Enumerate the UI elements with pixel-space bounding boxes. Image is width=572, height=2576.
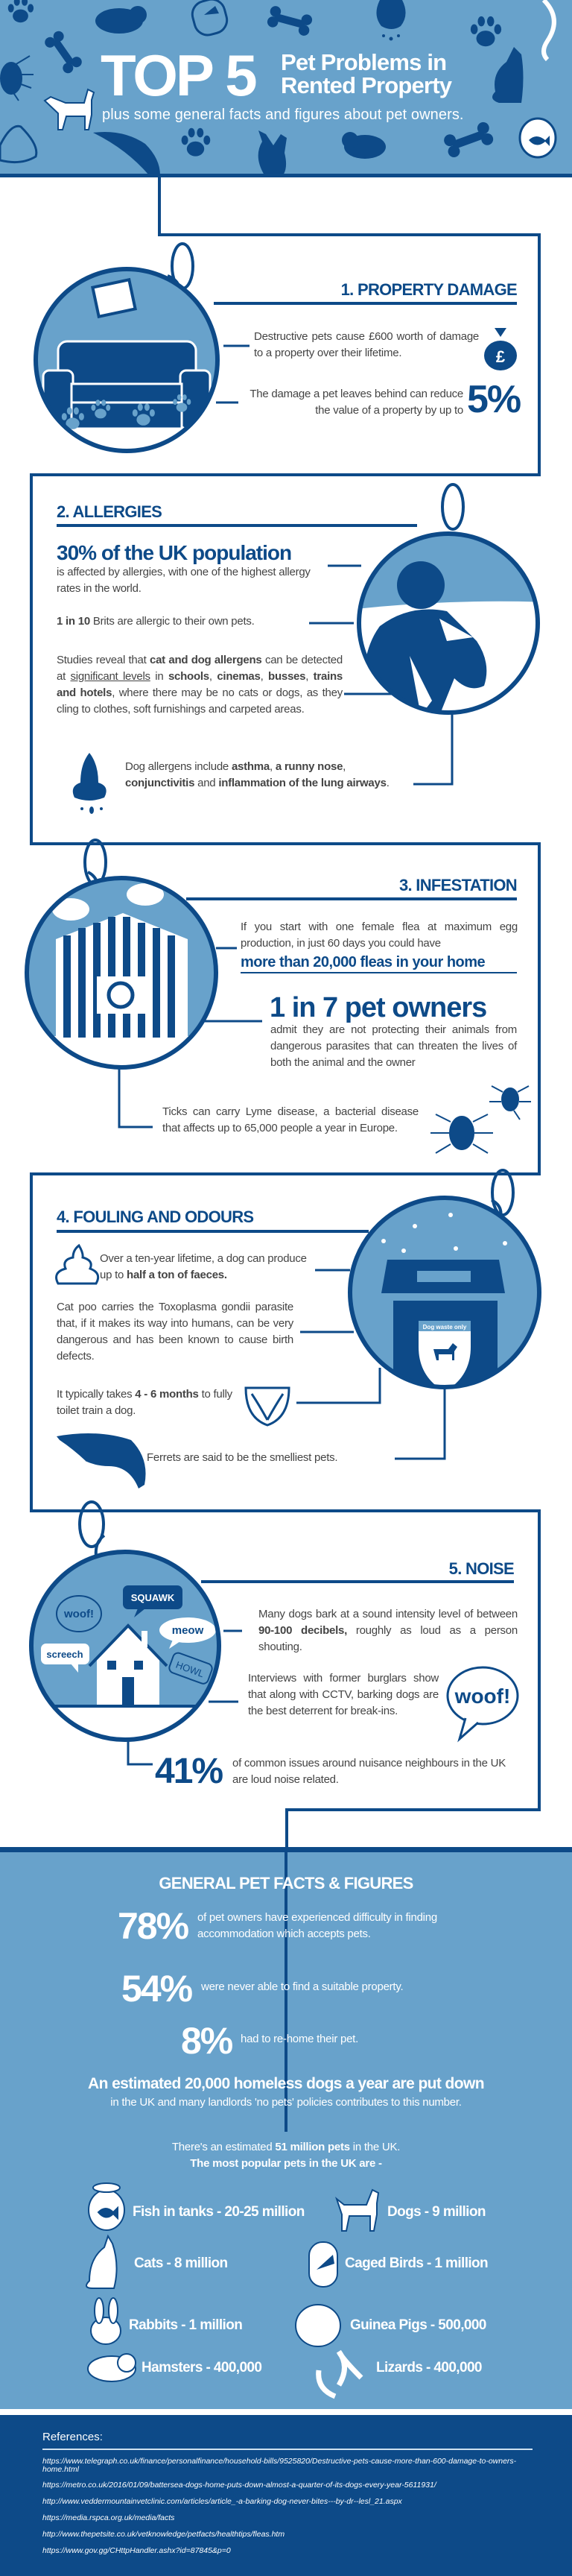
connectors section 1 (214, 303, 517, 402)
ferrets text: Ferrets are said to be the smelliest pets. (147, 1451, 337, 1464)
parasite text: admit they are not protecting their animals from dangerous parasites that can threaten the lives of both the animal and the owner (270, 1023, 517, 1069)
allergy 1 in 10: 1 in 10 Brits are allergic to their own pets. (57, 615, 255, 628)
stat 5%: 5% (467, 378, 520, 421)
icon: allergy tag (357, 483, 540, 715)
stat 78%: 78% (118, 1905, 188, 1947)
subtitle heading: Rented Property (281, 72, 451, 98)
decibels text: Many dogs bark at a sound intensity level of between 90-100 decibels, roughly as loud as a person shouting. (258, 1608, 518, 1653)
allergens text: Studies reveal that cat and dog allergens can be detected at significant levels in schools, cinemas, busses, trains and hotels, where there may be no cats or dogs, as they cling to clothes, soft furnishings and carpeted areas. (57, 654, 343, 716)
toxoplasma text: Cat poo carries the Toxoplasma gondii parasite that, if it makes its way into humans, can be very dangerous and has been known to cause birth defects. (57, 1301, 293, 1363)
icon: property damage tag (34, 242, 220, 453)
cats: Cats - 8 million (134, 2255, 228, 2271)
flea stat: more than 20,000 fleas in your home (241, 954, 485, 970)
icon: fouling tag (346, 1170, 547, 1398)
icon: ferret tail (57, 1433, 146, 1489)
nuisance text: of common issues around nuisance neighbours in the UK are loud noise related. (232, 1757, 506, 1786)
references list (42, 2457, 516, 2555)
burglars text: Interviews with former burglars show that along with CCTV, barking dogs are the best deterrent for break-ins. (248, 1672, 439, 1717)
stat 54%: 54% (121, 1968, 191, 2010)
section 1 text: damage cost: Destructive pets cause £600 worth of damage to a property over their lifetime. (254, 330, 479, 359)
references list: https://media.rspca.org.uk/media/facts (42, 2513, 174, 2522)
allergy text: is affected by allergies, with one of the highest allergy rates in the world. (57, 566, 311, 595)
section 2 heading: 2. ALLERGIES (57, 502, 162, 521)
icon: fouling tag: Dog waste only (423, 1324, 467, 1330)
references heading: References: (42, 2431, 103, 2443)
references list: https://www.gov.gg/CHttpHandler.ashx?id=87845&p=0 (42, 2546, 231, 2555)
flea text: If you start with one female flea at maximum egg production, in just 60 days you could have (241, 921, 518, 950)
1 in 7 stat: 1 in 7 pet owners (270, 992, 486, 1023)
fish: Fish in tanks - 20-25 million (133, 2204, 305, 2220)
homeless dogs text: An estimated 20,000 homeless dogs a year are put down (88, 2075, 484, 2092)
allergy stat: 30% of the UK population (57, 541, 291, 564)
subtitle heading (281, 49, 452, 98)
51 million text: There's an estimated 51 million pets in the UK. (172, 2141, 400, 2153)
section 1 heading: 1. PROPERTY DAMAGE (341, 280, 517, 299)
homeless dogs subtext: in the UK and many landlords 'no pets' policies contributes to this number. (110, 2096, 462, 2109)
pet icons (86, 2183, 378, 2396)
icon: ticks (430, 1086, 531, 1153)
stat 41%: 41% (155, 1752, 222, 1791)
78% text: of pet owners have experienced difficulty in finding accommodation which accepts pets. (197, 1911, 437, 1940)
references list: https://www.telegraph.co.uk/finance/personalfinance/household-bills/9525820/Destructive-pets-cause-more-than-600-damage-to-owners-home.html (42, 2457, 516, 2474)
guinea pigs: Guinea Pigs - 500,000 (350, 2317, 486, 2333)
icon: nose (73, 753, 107, 814)
header dog (45, 89, 94, 130)
icon: poo (57, 1246, 98, 1284)
54% text: were never able to find a suitable property. (201, 1980, 403, 1993)
8% text: had to re-home their pet. (241, 2033, 358, 2045)
tagline: plus some general facts and figures about pet owners. (102, 107, 464, 123)
header background (0, 0, 572, 177)
popular pets list (129, 2204, 488, 2375)
subtitle heading: Pet Problems in (281, 49, 446, 75)
ticks text: Ticks can carry Lyme disease, a bacterial disease that affects up to 65,000 people a year in Europe. (162, 1105, 419, 1134)
icon: noise tag: SQUAWK (131, 1592, 175, 1603)
dogs: Dogs - 9 million (387, 2204, 486, 2220)
51 million text (172, 2141, 400, 2170)
references list: http://www.veddermountainvetclinic.com/articles/article_-a-barking-dog-never-bites---by-dr--lesl_21.aspx (42, 2497, 402, 2506)
icon: woof bubble: woof! (454, 1685, 510, 1708)
references list: https://metro.co.uk/2016/01/09/battersea-dogs-home-puts-down-almost-a-quarter-of-its-dogs-every-year-5611931/ (42, 2481, 436, 2490)
hamsters: Hamsters - 400,000 (142, 2360, 261, 2375)
section 4 heading: 4. FOULING AND ODOURS (57, 1208, 253, 1226)
faeces text: Over a ten-year lifetime, a dog can produce up to half a ton of faeces. (100, 1252, 307, 1281)
icon: woof bubble (448, 1667, 518, 1739)
references list: http://www.thepetsite.co.uk/vetknowledge/petfacts/healthtips/fleas.htm (42, 2530, 285, 2539)
icon: noise tag: meow (172, 1624, 204, 1637)
lizards: Lizards - 400,000 (376, 2360, 482, 2375)
references background (0, 2415, 572, 2576)
general facts background (0, 1847, 572, 2409)
title: TOP 5 (101, 42, 255, 108)
symptoms text: Dog allergens include asthma, a runny nose, conjunctivitis and inflammation of the lung airways. (125, 760, 390, 789)
section 3 heading: 3. INFESTATION (399, 876, 517, 894)
stat 8%: 8% (181, 2020, 232, 2062)
general facts heading: GENERAL PET FACTS & FIGURES (159, 1874, 413, 1892)
caged birds: Caged Birds - 1 million (345, 2255, 488, 2271)
toilet training text: It typically takes 4 - 6 months to fully toilet train a dog. (57, 1388, 232, 1417)
icon: noise tag (30, 1502, 223, 1752)
section 1 text: value: The damage a pet leaves behind can reduce the value of a property by up to (250, 388, 463, 417)
icon: nappy (246, 1388, 289, 1425)
section 5 heading: 5. NOISE (449, 1559, 514, 1578)
header icons (0, 0, 556, 175)
icon: money bag (484, 328, 517, 370)
icon: noise tag: HOWL (174, 1659, 206, 1679)
flow lines (31, 176, 539, 1850)
rabbits: Rabbits - 1 million (129, 2317, 242, 2333)
51 million text: The most popular pets in the UK are - (190, 2157, 382, 2170)
icon: noise tag: woof! (63, 1608, 94, 1620)
icon: infestation tag (22, 840, 223, 1081)
icon: noise tag: screech (46, 1649, 83, 1660)
icon: money bag: £ (496, 347, 506, 366)
